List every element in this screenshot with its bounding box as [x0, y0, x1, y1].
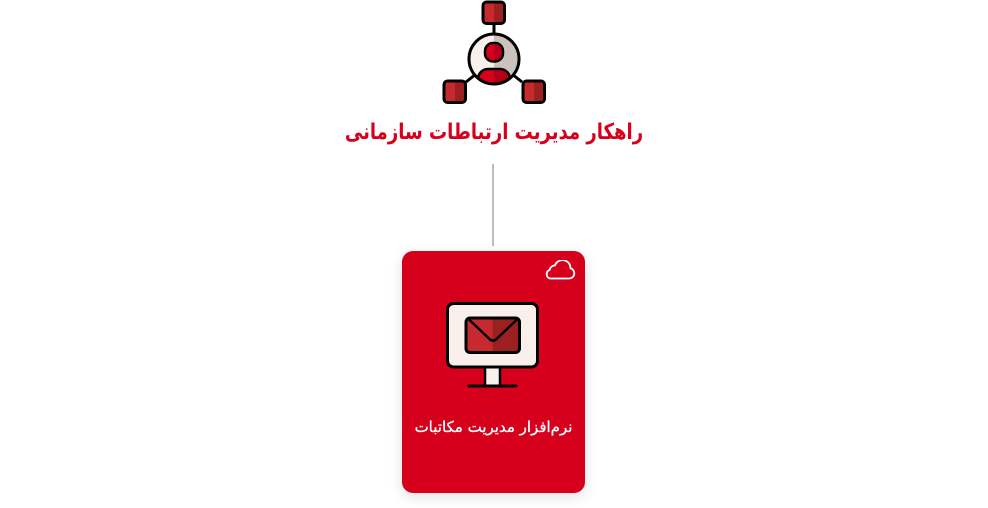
icon: cloud [546, 260, 576, 280]
card label: نرم‌افزار مدیریت مکاتبات [415, 418, 572, 436]
icon: network of people [442, 0, 546, 104]
left node [444, 81, 466, 102]
connector lines [466, 24, 522, 82]
title: راهکار مدیریت ارتباطات سازمانی [345, 120, 643, 145]
monitor stand [485, 367, 500, 386]
central person circle [469, 34, 519, 93]
top node [483, 2, 504, 24]
panel: card [402, 251, 585, 493]
connector line [492, 164, 494, 246]
monitor screen [448, 304, 538, 367]
envelope [466, 318, 520, 352]
icon: monitor with envelope [446, 302, 539, 388]
right node [523, 81, 544, 102]
monitor base [469, 384, 516, 388]
